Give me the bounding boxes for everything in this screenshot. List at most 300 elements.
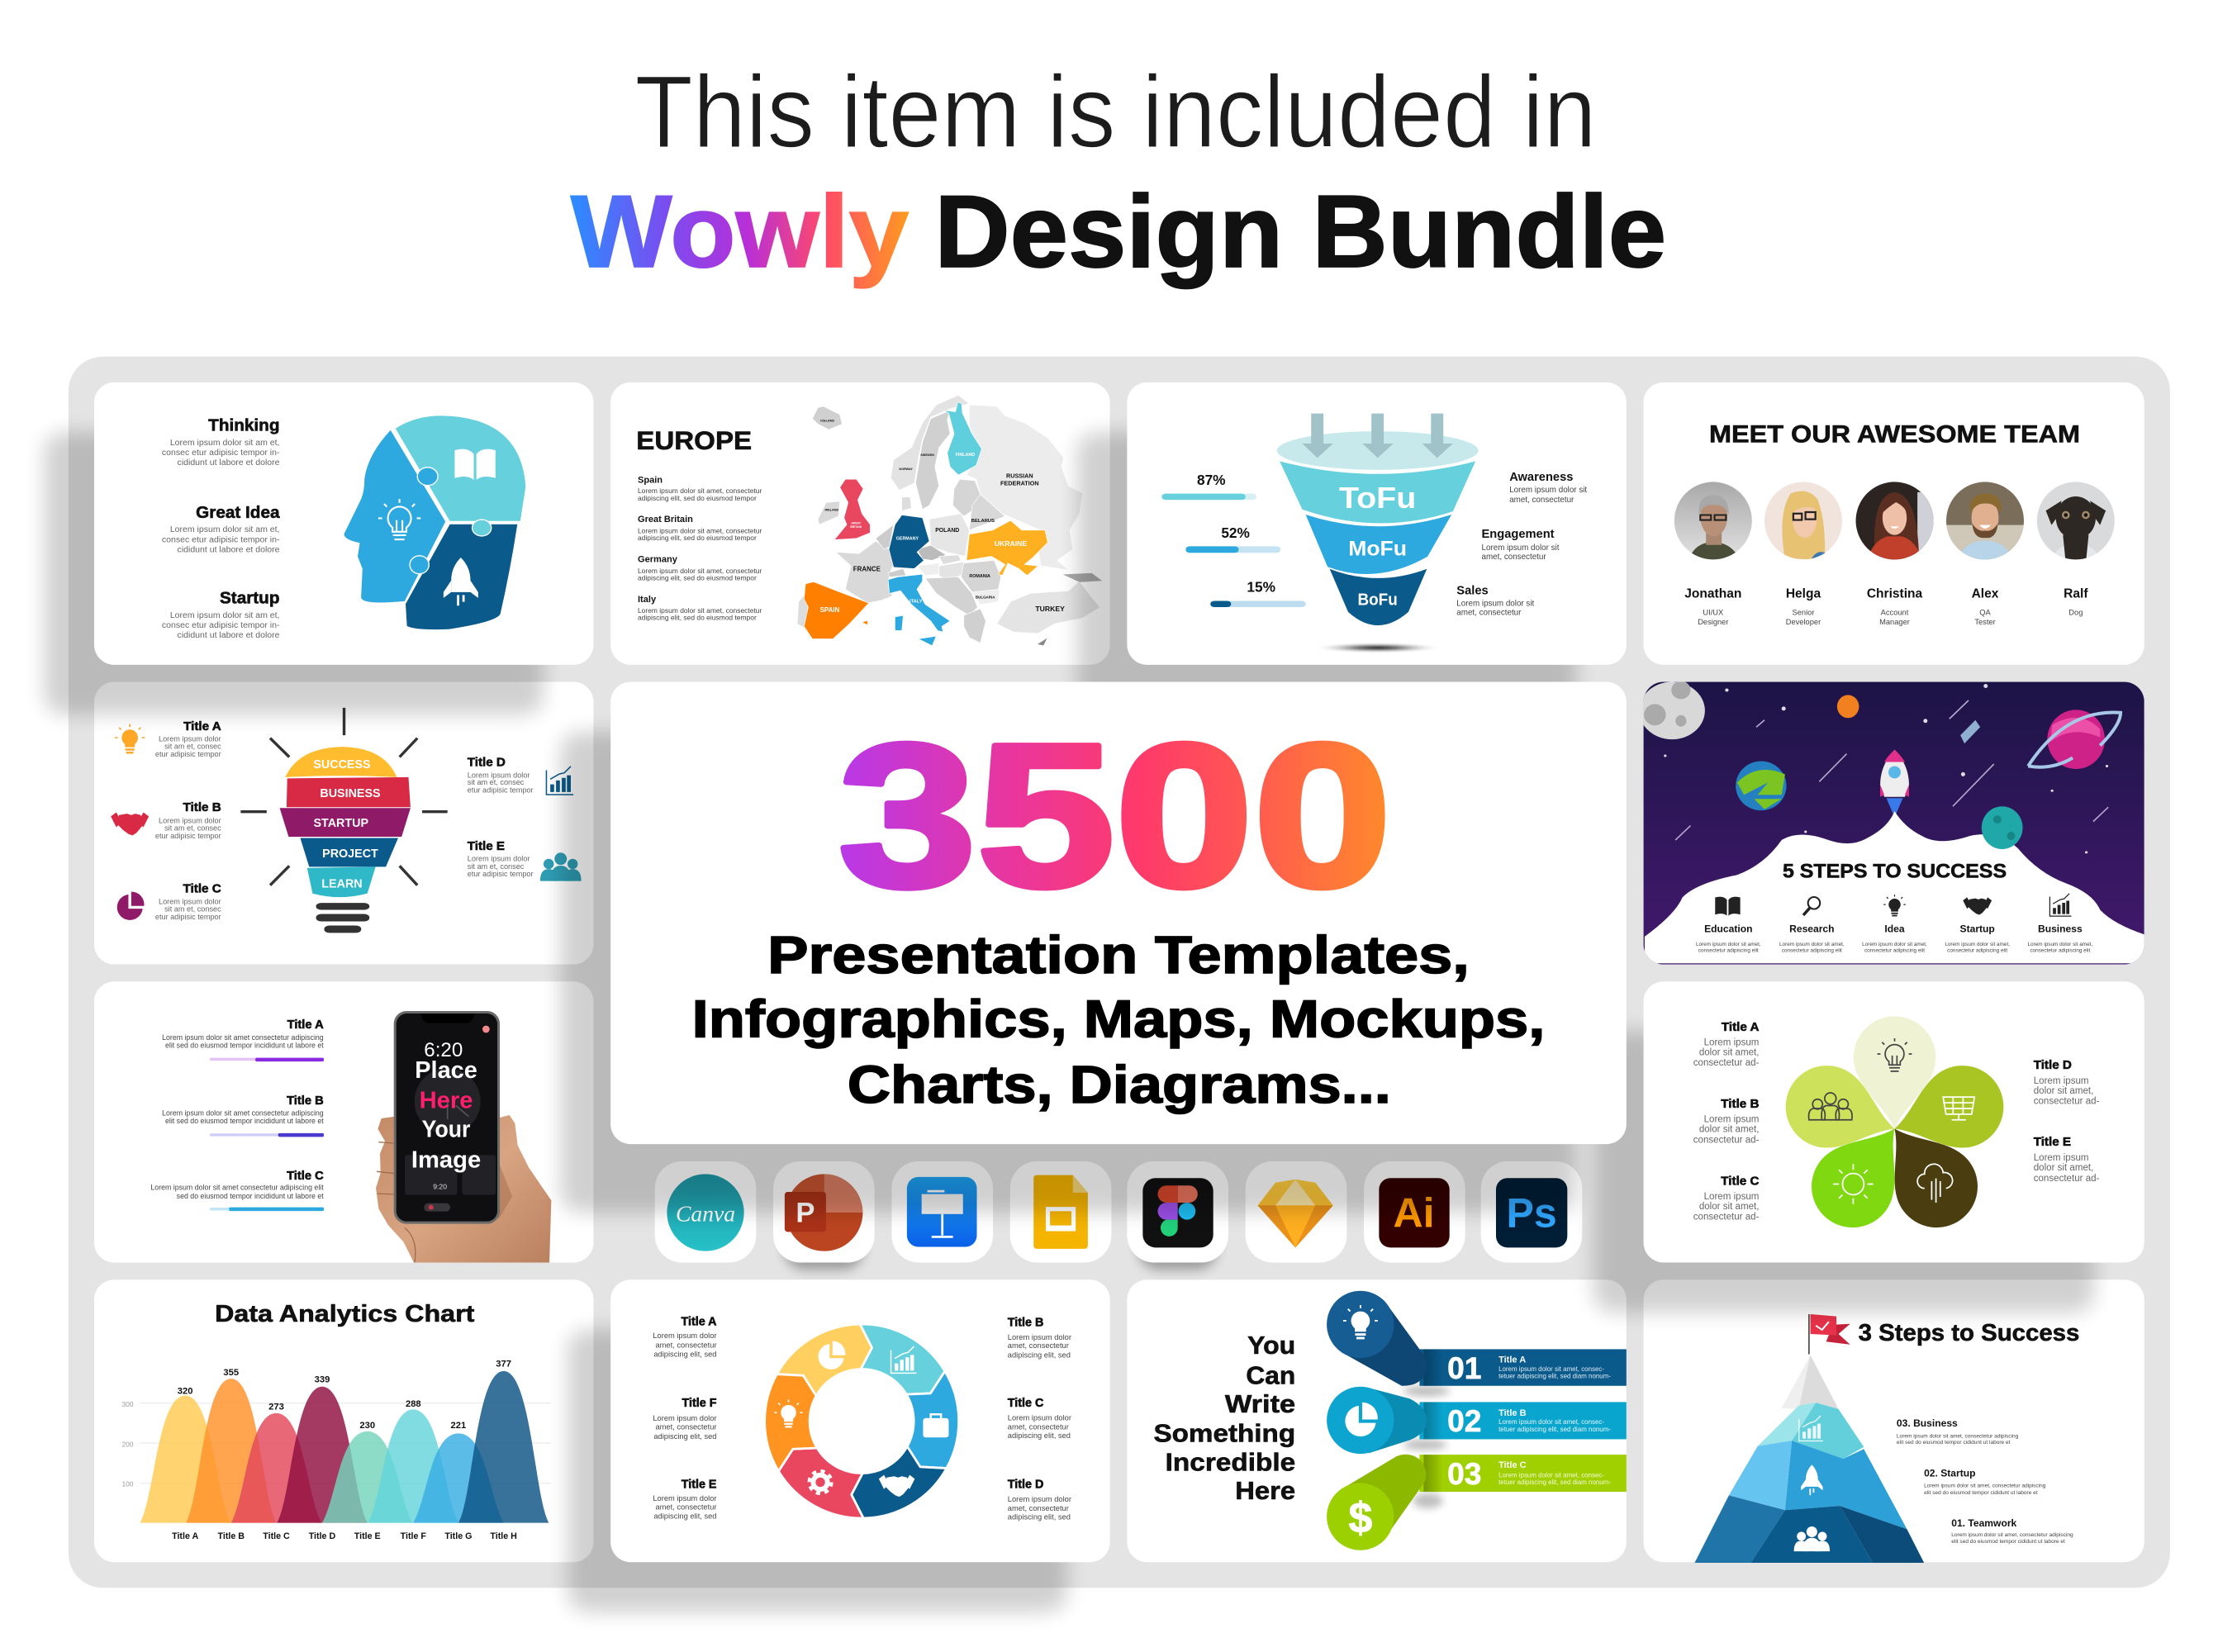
panel: lightbulb layers: PROJECT xyxy=(322,847,378,861)
ring labels: Title A xyxy=(681,1315,716,1328)
map heading: EUROPE xyxy=(636,426,752,455)
panel: lightbulb layers: BUSINESS xyxy=(320,787,381,800)
petal labels: Title D xyxy=(2034,1058,2072,1072)
petal labels: Lorem ipsum xyxy=(2034,1153,2089,1163)
ring labels: adipiscing elit, sed xyxy=(1008,1431,1071,1440)
head labels: Lorem ipsum dolor sit am et, xyxy=(170,525,279,534)
map labels: UKRAINE xyxy=(995,539,1027,548)
ribbon text: tetuer adipiscing elit, sed diam nonum- xyxy=(1498,1426,1611,1433)
chart categories: Title F xyxy=(401,1531,426,1541)
petal labels xyxy=(1693,1020,2100,1222)
ring labels: amet, consectetur xyxy=(655,1423,716,1431)
steps heading: 5 STEPS TO SUCCESS xyxy=(1783,861,2007,883)
chart categories: Title E xyxy=(354,1531,381,1541)
team names: Christina xyxy=(1867,587,1923,601)
petal labels: Title C xyxy=(1721,1174,1759,1188)
head icons xyxy=(378,449,496,605)
funnel descriptions: Lorem ipsum dolor sit xyxy=(1509,486,1587,495)
chart categories xyxy=(172,1531,517,1541)
ribbon text: Lorem ipsum dolor sit amet, consec- xyxy=(1498,1418,1604,1426)
map labels: TURKEY xyxy=(1035,605,1065,613)
icon: navy chart xyxy=(546,767,573,795)
icon: Photoshop xyxy=(1496,1178,1567,1247)
ribbon text: Title A xyxy=(1498,1355,1526,1365)
team names: Jonathan xyxy=(1684,587,1741,601)
petal labels: consectetur ad- xyxy=(2034,1174,2100,1184)
ring labels: Lorem ipsum dolor xyxy=(1008,1413,1071,1422)
head labels xyxy=(162,416,280,640)
icon: orange bulb xyxy=(115,724,145,753)
headline text: Something xyxy=(1153,1421,1295,1448)
funnel descriptions: Engagement xyxy=(1482,528,1555,541)
step labels: consectetur adipiscing elit xyxy=(1864,948,1925,954)
axis labels xyxy=(122,1401,134,1488)
title line two: Wowly xyxy=(571,174,909,289)
panel: space steps xyxy=(1639,681,2144,965)
funnel descriptions: Lorem ipsum dolor sit xyxy=(1456,600,1535,609)
bulb labels: etur adipisic tempor xyxy=(468,786,534,794)
petal labels: consectetur ad- xyxy=(1693,1135,1760,1145)
ribbon text: 01 xyxy=(1447,1351,1481,1385)
ring labels: Title F xyxy=(682,1397,717,1410)
ring labels: amet, consectetur xyxy=(655,1502,716,1511)
bulb labels: Lorem ipsum dolor xyxy=(468,771,530,779)
icon: red handshake xyxy=(111,813,149,835)
step labels: Lorem ipsum dolor sit amet, xyxy=(1696,942,1761,947)
petal labels: dolor sit amet, xyxy=(1699,1202,1759,1212)
phone body xyxy=(394,1011,500,1224)
panel: europe map xyxy=(610,382,1110,665)
ring labels: adipiscing elit, sed xyxy=(653,1350,716,1358)
petal labels: Title E xyxy=(2034,1135,2071,1149)
bulb labels: etur adipisic tempor xyxy=(155,750,221,758)
petal labels: Title B xyxy=(1721,1097,1759,1111)
phone body: Place xyxy=(415,1057,477,1084)
panel: lightbulb layers: SUCCESS xyxy=(313,758,371,771)
ring labels: Title E xyxy=(682,1478,716,1491)
head labels: Thinking xyxy=(208,416,279,435)
team names: Dog xyxy=(2068,608,2083,616)
team names: QA xyxy=(1979,608,1992,616)
map labels: ROMANIA xyxy=(969,574,990,579)
big number: 3500 xyxy=(838,702,1392,930)
axis labels: 200 xyxy=(122,1441,134,1448)
step labels: Lorem ipsum dolor sit amet, xyxy=(2028,942,2092,947)
step descriptions: Lorem ipsum dolor sit amet, consectetur adipiscing xyxy=(1897,1434,2019,1440)
headline text: Write xyxy=(1225,1391,1295,1418)
step descriptions: elit sed do eiusmod tempor cididunt ut labore et xyxy=(1924,1490,2038,1496)
map labels: BRITAIN xyxy=(850,525,862,529)
ribbon text: Title B xyxy=(1498,1408,1527,1418)
funnel descriptions: amet, consectetur xyxy=(1482,553,1546,562)
ring icons xyxy=(774,1341,948,1497)
ring segments xyxy=(735,1299,988,1543)
head labels: Great Idea xyxy=(196,503,280,522)
ribbon text: tetuer adipiscing elit, sed diam nonum- xyxy=(1498,1479,1611,1486)
step labels: Business xyxy=(2038,923,2083,934)
country list: Lorem ipsum dolor sit amet, consectetur xyxy=(638,606,762,615)
panel: you can write ribbons xyxy=(1127,1279,1627,1563)
petal labels: dolor sit amet, xyxy=(1699,1125,1759,1135)
step labels xyxy=(1696,923,2092,954)
ring labels: Lorem ipsum dolor xyxy=(1008,1495,1071,1503)
ring labels: adipiscing elit, sed xyxy=(653,1512,716,1521)
step descriptions: 03. Business xyxy=(1897,1417,1958,1429)
petal icons xyxy=(1809,1038,1974,1204)
map labels: SWEDEN xyxy=(920,453,934,457)
map labels: BULGARIA xyxy=(976,596,995,600)
petal labels: Lorem ipsum xyxy=(1704,1192,1759,1202)
icon: Canva: Canva xyxy=(676,1200,735,1226)
step descriptions: Lorem ipsum dolor sit amet, consectetur adipiscing xyxy=(1951,1532,2073,1538)
panel: central headline xyxy=(610,682,1627,1144)
photo: Helga xyxy=(1764,481,1843,563)
step descriptions: elit sed do eiusmod tempor cididunt ut labore et xyxy=(1951,1539,2065,1545)
petal labels: consectetur ad- xyxy=(1693,1058,1760,1068)
map labels: ICELAND xyxy=(820,419,834,422)
step labels: consectetur adipiscing elit xyxy=(1782,948,1842,954)
bulb labels: Lorem ipsum dolor xyxy=(159,735,221,743)
panel: team xyxy=(1644,382,2144,665)
ring labels xyxy=(653,1315,1071,1521)
phone panel text: sed do eiusmod tempor incididunt ut labore et xyxy=(177,1192,324,1200)
ring labels: Title D xyxy=(1008,1478,1043,1491)
icon: Keynote xyxy=(907,1177,977,1246)
mountain diagram xyxy=(1694,1314,1924,1563)
ring labels: Title B xyxy=(1008,1316,1043,1329)
chart values: 339 xyxy=(315,1375,330,1385)
chart values: 377 xyxy=(496,1360,511,1370)
map labels: IRELAND xyxy=(824,508,839,511)
funnel percentages: 15% xyxy=(1247,579,1275,596)
bulb labels: sit am et, consec xyxy=(164,904,221,913)
phone panel text: elit sed do eiusmod tempor incididunt ut labore et xyxy=(165,1042,324,1050)
funnel descriptions: Lorem ipsum dolor sit xyxy=(1482,544,1560,553)
petal labels: consectetur ad- xyxy=(1693,1213,1760,1222)
map xyxy=(797,395,1103,646)
title line two xyxy=(571,174,1666,289)
panel: 3 steps mountain xyxy=(1644,1279,2144,1563)
headline text: Here xyxy=(1235,1478,1295,1505)
funnel descriptions: Awareness xyxy=(1509,471,1573,484)
ring labels: amet, consectetur xyxy=(1008,1423,1069,1431)
step descriptions: Lorem ipsum dolor sit amet, consectetur adipiscing xyxy=(1924,1483,2046,1489)
mountain heading: 3 Steps to Success xyxy=(1859,1320,2079,1346)
step labels: Startup xyxy=(1960,923,1995,934)
phone panel text: Title A xyxy=(287,1018,324,1032)
team names: Developer xyxy=(1786,618,1821,626)
phone panel text: Title C xyxy=(287,1170,324,1183)
panel: cycle diagram xyxy=(610,1279,1110,1562)
bulb labels: Title D xyxy=(468,755,506,769)
ring labels: Lorem ipsum dolor xyxy=(653,1494,716,1502)
map labels: ITALY xyxy=(910,599,923,604)
bulb labels xyxy=(155,719,534,921)
bulb labels: Title E xyxy=(468,839,505,853)
country list: adipiscing elit, sed do eiusmod tempor xyxy=(638,574,757,582)
app icon tiles xyxy=(655,1161,1582,1270)
bulb labels: sit am et, consec xyxy=(468,778,525,786)
step labels: Lorem ipsum dolor sit amet, xyxy=(1862,942,1927,947)
chart values: 355 xyxy=(223,1368,239,1378)
ring labels: amet, consectetur xyxy=(1008,1341,1069,1350)
ring labels: amet, consectetur xyxy=(1008,1504,1069,1512)
bulb labels: Lorem ipsum dolor xyxy=(468,854,530,862)
map labels: FEDERATION xyxy=(1000,480,1039,487)
petal labels: dolor sit amet, xyxy=(2034,1086,2093,1096)
ring labels: Title C xyxy=(1008,1397,1043,1410)
phone panel text: Title B xyxy=(287,1094,324,1108)
headline text xyxy=(692,925,1545,1114)
bulb labels: sit am et, consec xyxy=(164,743,221,751)
phone panel text xyxy=(150,1018,324,1211)
ring labels: adipiscing elit, sed xyxy=(1008,1512,1071,1521)
chart categories: Title H xyxy=(490,1531,517,1541)
title line two: Design Bundle xyxy=(934,174,1666,289)
chart values xyxy=(178,1360,511,1431)
step labels: consectetur adipiscing elit xyxy=(1947,948,2007,954)
headline text: Infographics, Maps, Mockups, xyxy=(692,990,1545,1049)
funnel labels: ToFu xyxy=(1339,481,1416,515)
headline text: You xyxy=(1247,1332,1295,1360)
bulb labels: Lorem ipsum dolor xyxy=(159,897,221,905)
photo: Christina xyxy=(1855,481,1935,563)
bulb labels: sit am et, consec xyxy=(164,824,221,833)
team names: Alex xyxy=(1972,587,1999,601)
head labels: Lorem ipsum dolor sit am et, xyxy=(170,610,279,620)
photo: Jonathan xyxy=(1673,481,1753,563)
bulb labels: etur adipisic tempor xyxy=(155,832,221,840)
phone panel text: Lorem ipsum dolor sit amet consectetur adipiscing elit xyxy=(150,1183,324,1191)
team names xyxy=(1684,587,2088,626)
panel: petal diagram xyxy=(1644,981,2144,1262)
chart values: 221 xyxy=(451,1421,466,1431)
space scene xyxy=(1639,681,2144,963)
icon: Illustrator xyxy=(1379,1178,1450,1247)
bulb labels: Title A xyxy=(183,719,221,733)
chart values: 320 xyxy=(178,1386,193,1396)
step labels: Education xyxy=(1704,923,1753,934)
icon: PowerPoint: P xyxy=(796,1197,815,1228)
team names: Designer xyxy=(1698,618,1728,626)
step labels: Idea xyxy=(1884,923,1905,934)
headline text: Charts, Diagrams... xyxy=(848,1055,1391,1114)
phone body: Here xyxy=(420,1088,473,1114)
step descriptions: 01. Teamwork xyxy=(1951,1517,2017,1529)
background container xyxy=(69,357,2170,1588)
bulb diagram xyxy=(240,708,448,933)
map labels: POLAND xyxy=(935,528,959,534)
axis labels: 100 xyxy=(122,1481,134,1488)
headline text: Can xyxy=(1246,1362,1295,1389)
funnel descriptions: amet, consectetur xyxy=(1456,608,1522,617)
map labels: FINLAND xyxy=(956,453,975,458)
ring labels: amet, consectetur xyxy=(655,1341,716,1349)
ribbons xyxy=(1327,1290,1627,1550)
country list: Lorem ipsum dolor sit amet, consectetur xyxy=(638,567,762,575)
bulb labels: Title C xyxy=(183,882,221,896)
funnel labels: MoFu xyxy=(1348,538,1407,561)
head labels: cididunt ut labore et dolore xyxy=(178,458,280,468)
ribbon text: Lorem ipsum dolor sit amet, consec- xyxy=(1498,1365,1604,1373)
ribbon icons: $ xyxy=(1349,1493,1372,1541)
axis labels: 300 xyxy=(122,1401,134,1408)
funnel descriptions: amet, consectetur xyxy=(1509,496,1574,505)
chart categories: Title G xyxy=(444,1531,472,1541)
ring labels: Lorem ipsum dolor xyxy=(653,1414,716,1422)
head labels: Lorem ipsum dolor sit am et, xyxy=(170,438,279,448)
panel: lightbulb layers: STARTUP xyxy=(313,817,368,830)
ribbon text: tetuer adipiscing elit, sed diam nonum- xyxy=(1498,1373,1611,1380)
icon: Sketch xyxy=(1258,1180,1333,1247)
ring labels: adipiscing elit, sed xyxy=(1008,1351,1071,1359)
funnel percentages: 87% xyxy=(1197,472,1226,488)
funnel labels xyxy=(1339,481,1416,609)
head labels: cididunt ut labore et dolore xyxy=(178,544,280,554)
ribbon text xyxy=(1447,1351,1611,1491)
headline text: Presentation Templates, xyxy=(767,925,1470,985)
head labels: consec etur adipisic tempor in- xyxy=(162,620,280,630)
phone body: 6:20 xyxy=(424,1039,463,1061)
ribbon text: 03 xyxy=(1447,1456,1481,1491)
phone body: 9:20 xyxy=(433,1182,447,1190)
icon: purple pie xyxy=(117,891,145,920)
chart heading: Data Analytics Chart xyxy=(215,1301,475,1327)
step descriptions: elit sed do eiusmod tempor cididunt ut labore et xyxy=(1897,1440,2011,1446)
funnel percentages: 52% xyxy=(1221,525,1250,541)
ribbon icons xyxy=(1343,1305,1378,1541)
petal labels: Lorem ipsum xyxy=(1704,1114,1759,1124)
bulb labels: etur adipisic tempor xyxy=(155,913,221,921)
photo: Ralf the dog xyxy=(2035,481,2116,563)
petal labels: dolor sit amet, xyxy=(2034,1163,2093,1173)
step descriptions: 02. Startup xyxy=(1924,1468,1976,1479)
icon: Illustrator: Ai xyxy=(1393,1189,1435,1236)
country list: Italy xyxy=(638,595,657,605)
map labels: GERMANY xyxy=(896,537,919,542)
petals xyxy=(1775,1016,2014,1244)
country list: Lorem ipsum dolor sit amet, consectetur xyxy=(638,487,762,495)
phone panel text: Lorem ipsum dolor sit amet consectetur adipiscing xyxy=(162,1109,324,1118)
step labels: Lorem ipsum dolor sit amet, xyxy=(1779,942,1845,947)
head labels: cididunt ut labore et dolore xyxy=(178,630,280,640)
country list: adipiscing elit, sed do eiusmod tempor xyxy=(638,534,757,542)
country list: Lorem ipsum dolor sit amet, consectetur xyxy=(638,527,762,535)
team names: UI/UX xyxy=(1703,608,1724,616)
team heading: MEET OUR AWESOME TEAM xyxy=(1709,420,2080,448)
ring labels: Lorem ipsum dolor xyxy=(1008,1333,1071,1341)
chart categories: Title D xyxy=(309,1531,335,1541)
map labels: RUSSIAN xyxy=(1006,472,1033,480)
petal labels: Lorem ipsum xyxy=(2034,1076,2089,1086)
step labels: consectetur adipiscing elit xyxy=(2030,948,2091,954)
photo: Alex xyxy=(1945,481,2025,563)
bulb labels: Lorem ipsum dolor xyxy=(159,817,221,825)
map labels: FRANCE xyxy=(853,566,881,573)
team names: Manager xyxy=(1879,618,1910,626)
step labels: consectetur adipiscing elit xyxy=(1698,948,1759,954)
mountain icons xyxy=(1794,1416,1830,1551)
title line one: This item is included in xyxy=(635,55,1597,169)
team names: Helga xyxy=(1786,587,1821,601)
icon: Canva xyxy=(667,1174,744,1251)
country list: Germany xyxy=(638,554,678,564)
ribbon text: Title C xyxy=(1498,1460,1527,1470)
petal labels: Title A xyxy=(1722,1020,1759,1034)
head labels: consec etur adipisic tempor in- xyxy=(162,534,280,544)
map labels: NORWAY xyxy=(899,468,913,471)
country list: Spain xyxy=(638,476,663,486)
panel: data analytics chart xyxy=(94,1279,593,1562)
team names: Account xyxy=(1881,608,1909,616)
icon: Google Slides xyxy=(1033,1175,1088,1249)
step descriptions xyxy=(1897,1417,2073,1545)
ribbon text: 02 xyxy=(1447,1403,1481,1438)
head labels: Startup xyxy=(220,589,279,608)
icon: Photoshop: Ps xyxy=(1507,1189,1557,1236)
country list: adipiscing elit, sed do eiusmod tempor xyxy=(638,494,757,502)
phone panel text: Lorem ipsum dolor sit amet consectetur adipiscing xyxy=(162,1033,324,1042)
petal labels: consectetur ad- xyxy=(2034,1096,2100,1106)
headline text: Incredible xyxy=(1166,1450,1295,1477)
icon: Figma xyxy=(1142,1178,1213,1247)
funnel labels: BoFu xyxy=(1357,590,1398,609)
chart categories: Title B xyxy=(218,1531,245,1541)
head diagram xyxy=(344,415,526,630)
chart categories: Title C xyxy=(263,1531,290,1541)
team names: Tester xyxy=(1974,618,1996,626)
step icons xyxy=(1715,894,2072,916)
funnel diagram xyxy=(1162,414,1478,653)
icon: teal people xyxy=(540,852,582,881)
phone body: Image xyxy=(411,1146,481,1173)
chart categories: Title A xyxy=(172,1531,198,1541)
team names: Ralf xyxy=(2064,587,2088,601)
chart values: 288 xyxy=(406,1399,421,1409)
bulb labels: Title B xyxy=(183,800,221,814)
panel: lightbulb layers: LEARN xyxy=(321,877,363,890)
headline text xyxy=(1153,1332,1295,1505)
head labels: consec etur adipisic tempor in- xyxy=(162,448,280,458)
map labels: SPAIN xyxy=(820,606,840,614)
chart values: 230 xyxy=(359,1421,375,1431)
phone panel text: elit sed do eiusmod tempor incididunt ut labore et xyxy=(165,1117,324,1125)
bulb labels: etur adipisic tempor xyxy=(468,870,534,878)
country list xyxy=(638,476,762,621)
panel: head puzzle xyxy=(94,382,593,665)
step labels: Research xyxy=(1789,923,1835,934)
step labels: Lorem ipsum dolor sit amet, xyxy=(1945,942,2010,947)
petal labels: dolor sit amet, xyxy=(1699,1048,1759,1058)
bulb labels: sit am et, consec xyxy=(468,862,525,871)
ribbon text: Lorem ipsum dolor sit amet, consec- xyxy=(1498,1471,1604,1479)
funnel descriptions: Sales xyxy=(1456,585,1489,598)
chart values: 273 xyxy=(268,1402,284,1412)
panel: phone mockup xyxy=(94,981,593,1264)
country list: Great Britain xyxy=(638,515,693,525)
bell chart xyxy=(140,1371,551,1523)
map labels: GREAT xyxy=(851,521,862,525)
country list: adipiscing elit, sed do eiusmod tempor xyxy=(638,613,757,621)
ring labels: Lorem ipsum dolor xyxy=(653,1332,716,1340)
map labels: BELARUS xyxy=(971,519,995,524)
panel: funnel xyxy=(1127,382,1627,665)
hand holding phone xyxy=(376,1115,551,1264)
petal labels: Lorem ipsum xyxy=(1704,1037,1759,1047)
icon: PowerPoint xyxy=(785,1174,862,1251)
phone body: Your xyxy=(422,1117,470,1143)
map labels xyxy=(820,419,1065,614)
